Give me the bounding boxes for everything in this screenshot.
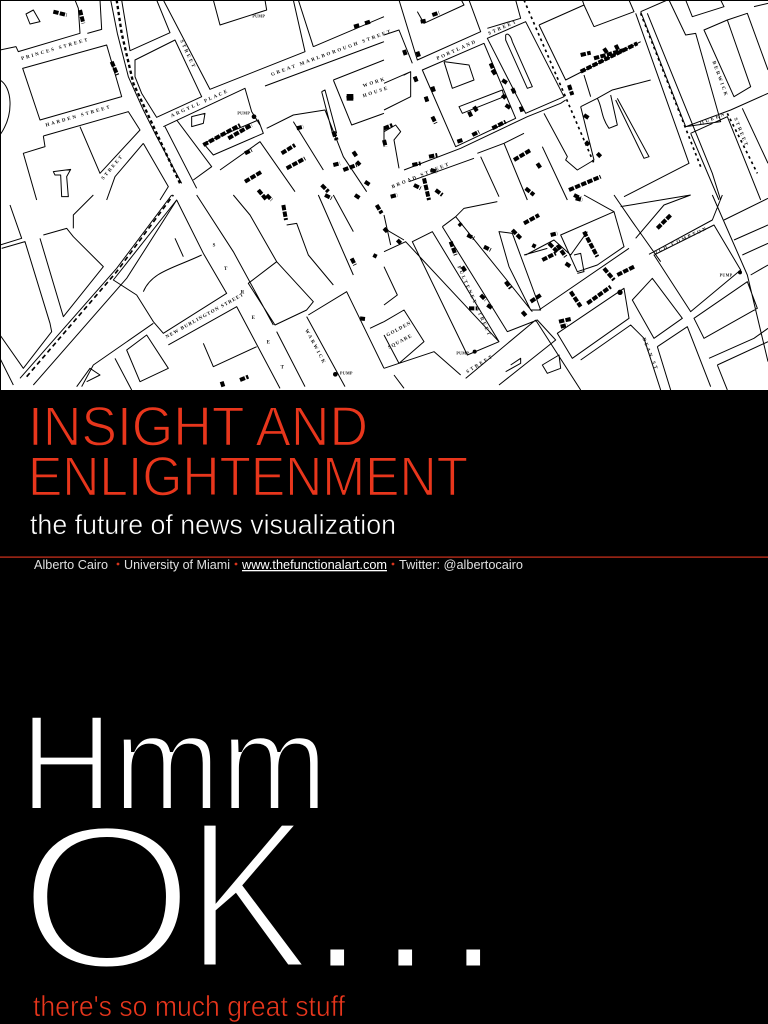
- street label: Great Pulteney Street: PULTENEY STREET: [456, 265, 492, 338]
- street label: Portland Street: PORTLAND: [436, 39, 478, 62]
- map border: [0, 0, 768, 390]
- pump label 2: PUMP: [252, 13, 265, 18]
- ellipsis dots: ...: [310, 791, 500, 1010]
- twitter handle: Twitter: @albertocairo: [399, 557, 523, 572]
- map: John Snow cholera map of Soho: E: [267, 340, 272, 345]
- street label: Princes Street: PRINCES STREET: [21, 38, 90, 62]
- map: John Snow cholera map of Soho: STREET: [488, 19, 519, 37]
- large word: Hmm: Hmm: [20, 687, 328, 840]
- website link: www.thefunctionalart.com: [241, 557, 387, 572]
- map: John Snow cholera map of Soho: SQUARE: [388, 334, 414, 351]
- map: John Snow cholera map of Soho: R: [241, 290, 246, 295]
- map: John Snow cholera map of Soho: [0, 0, 768, 390]
- street label: Golden Square: GOLDEN: [386, 321, 413, 338]
- title line 2: ENLIGHTENMENT: [28, 444, 468, 508]
- map: John Snow cholera map of Soho: T: [281, 365, 286, 370]
- bullet separator: [392, 563, 394, 565]
- letter K: K: [186, 777, 310, 1014]
- pump label 5: PUMP: [456, 350, 469, 355]
- subtitle: the future of news visualization: [30, 509, 396, 540]
- street label: Workhouse: WORK: [362, 77, 387, 89]
- street label: Broad Street: BROAD STREET: [391, 162, 451, 190]
- bullet separator: [235, 563, 237, 565]
- title: [28, 394, 468, 508]
- street label: Warwick: WARWICK: [303, 329, 326, 366]
- pump label 3: PUMP: [340, 370, 353, 375]
- street label: Street large letters: S: [213, 244, 217, 249]
- university: University of Miami: [124, 557, 230, 572]
- street label: Dean Street: DEAN ST: [640, 337, 658, 372]
- street label: Silver Street: STREET: [466, 354, 495, 375]
- large word: OK...: [19, 777, 500, 1014]
- street label: Great Marlborough Street: GREAT MARLBOROUGH STREET: [271, 29, 393, 78]
- title line 1: INSIGHT AND: [28, 394, 368, 458]
- pump label 4: PUMP: [720, 272, 733, 277]
- map: John Snow cholera map of Soho: HOUSE: [362, 86, 390, 99]
- street label: Old Compton Street: OLD COMPTON: [653, 226, 709, 256]
- street label: Argyll Place: ARGYLL PLACE: [170, 89, 230, 119]
- map: John Snow cholera map of Soho: T: [224, 267, 229, 272]
- bullet separator: [117, 563, 119, 565]
- byline: [34, 557, 523, 572]
- street label: Berwick Street: BERWICK: [710, 61, 728, 99]
- street label: New Burlington Street: NEW BURLINGTON STREET: [165, 293, 245, 340]
- letter O: O: [19, 782, 194, 1012]
- red closing line: there's so much great stuff: [33, 991, 346, 1023]
- map: John Snow cholera map of Soho: E: [252, 316, 257, 321]
- pump label 1: PUMP: [237, 110, 250, 115]
- street label: Street: STREET: [732, 117, 749, 148]
- street label: Argyll Street: STREET: [178, 39, 196, 70]
- red divider line: [0, 556, 768, 558]
- street label: Fox Street: STREET: [101, 154, 125, 181]
- street label: Harden Street: HARDEN STREET: [45, 105, 112, 129]
- author: Alberto Cairo: [34, 557, 108, 572]
- street label: Queen Street: QUEEN: [700, 112, 727, 127]
